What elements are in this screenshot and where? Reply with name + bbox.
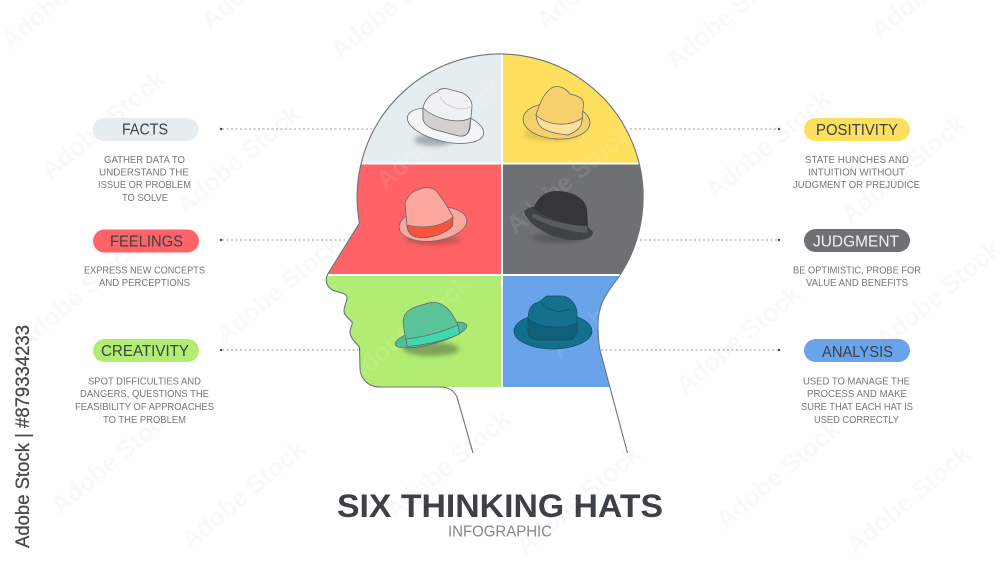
stock credit: Adobe Stock | #879334233: [13, 325, 34, 548]
head quadrants: [326, 54, 643, 387]
text: positivity description: JUDGMENT OR PREJUDICE: [793, 179, 920, 191]
panel: analysis: [801, 339, 913, 426]
text: analysis description: USED CORRECTLY: [814, 414, 899, 426]
pill: analysis: ANALYSIS: [822, 344, 893, 361]
watermark: Adobe Stock: [46, 400, 181, 520]
text: creativity description: TO THE PROBLEM: [103, 414, 186, 426]
text: judgment description: VALUE AND BENEFITS: [806, 277, 908, 289]
text: facts description: GATHER DATA TO: [104, 154, 185, 166]
head watermark: Adobe Stock: [501, 120, 636, 240]
icon: white hat: [404, 88, 487, 150]
watermark: Adobe Stock: [671, 280, 806, 400]
pill: feelings: FEELINGS: [110, 234, 183, 250]
head watermark: [360, 128, 630, 376]
text: judgment description: BE OPTIMISTIC, PROBE FOR: [793, 264, 921, 276]
text: creativity description: SPOT DIFFICULTIES AND: [88, 376, 201, 388]
pill: creativity: CREATIVITY: [101, 343, 189, 360]
panel: facts: [92, 118, 198, 204]
subtitle: INFOGRAPHIC: [448, 524, 552, 540]
icon: blue hat: [514, 296, 592, 349]
text: analysis description: SURE THAT EACH HAT IS: [801, 401, 913, 413]
text: positivity description: STATE HUNCHES AND: [805, 154, 909, 166]
text: analysis description: [801, 376, 913, 426]
text: feelings description: [84, 264, 205, 289]
watermark: Adobe Stock: [841, 440, 976, 560]
text: positivity description: [793, 154, 920, 191]
text: facts description: TO SOLVE: [122, 192, 168, 204]
watermark: Adobe Stock: [211, 230, 346, 350]
connector lines: [220, 128, 780, 351]
text: creativity description: FEASIBILITY OF APPROACHES: [75, 401, 214, 413]
text: facts description: ISSUE OR PROBLEM: [98, 179, 191, 191]
pill: positivity: POSITIVITY: [816, 122, 898, 139]
panel: feelings: [84, 230, 205, 289]
watermark: Adobe Stock: [511, 440, 646, 560]
pill: facts: FACTS: [122, 122, 168, 139]
text: feelings description: AND PERCEPTIONS: [99, 277, 190, 289]
pill: judgment: JUDGMENT: [813, 233, 900, 250]
title: SIX THINKING HATS: [337, 488, 663, 524]
watermark: Adobe Stock: [381, 405, 516, 525]
watermark: Adobe Stock: [36, 65, 171, 185]
panel: positivity: [793, 118, 920, 191]
text: analysis description: PROCESS AND MAKE: [807, 388, 907, 400]
watermark: Adobe Stock: [171, 100, 306, 220]
text: judgment description: [793, 264, 921, 289]
panel: judgment: [793, 229, 921, 289]
text: feelings description: EXPRESS NEW CONCEPTS: [84, 264, 205, 276]
watermark: Adobe Stock: [11, 235, 146, 355]
watermark: Adobe Stock: [836, 110, 971, 230]
text: creativity description: [75, 376, 214, 426]
infographic canvas: [14, 53, 920, 548]
head watermark: Adobe Stock: [341, 270, 476, 390]
watermark: Adobe Stock: [701, 85, 836, 205]
icon: red hat: [397, 188, 469, 245]
panel: creativity: [75, 339, 214, 426]
watermark: Adobe Stock: [176, 435, 311, 555]
icon: yellow hat: [522, 87, 591, 141]
head watermark: Adobe Stock: [371, 75, 506, 195]
icon: green hat: [393, 302, 469, 356]
head watermark: Adobe Stock: [546, 245, 681, 365]
text: analysis description: USED TO MANAGE THE: [803, 376, 910, 388]
head outline: [326, 54, 643, 453]
icon: black hat: [524, 191, 593, 243]
text: positivity description: INTUITION WITHOUT: [808, 166, 906, 178]
text: creativity description: DANGERS, QUESTIONS THE: [80, 388, 209, 400]
text: facts description: [98, 154, 191, 204]
text: facts description: UNDERSTAND THE: [99, 166, 189, 178]
watermark: Adobe Stock: [711, 415, 846, 535]
